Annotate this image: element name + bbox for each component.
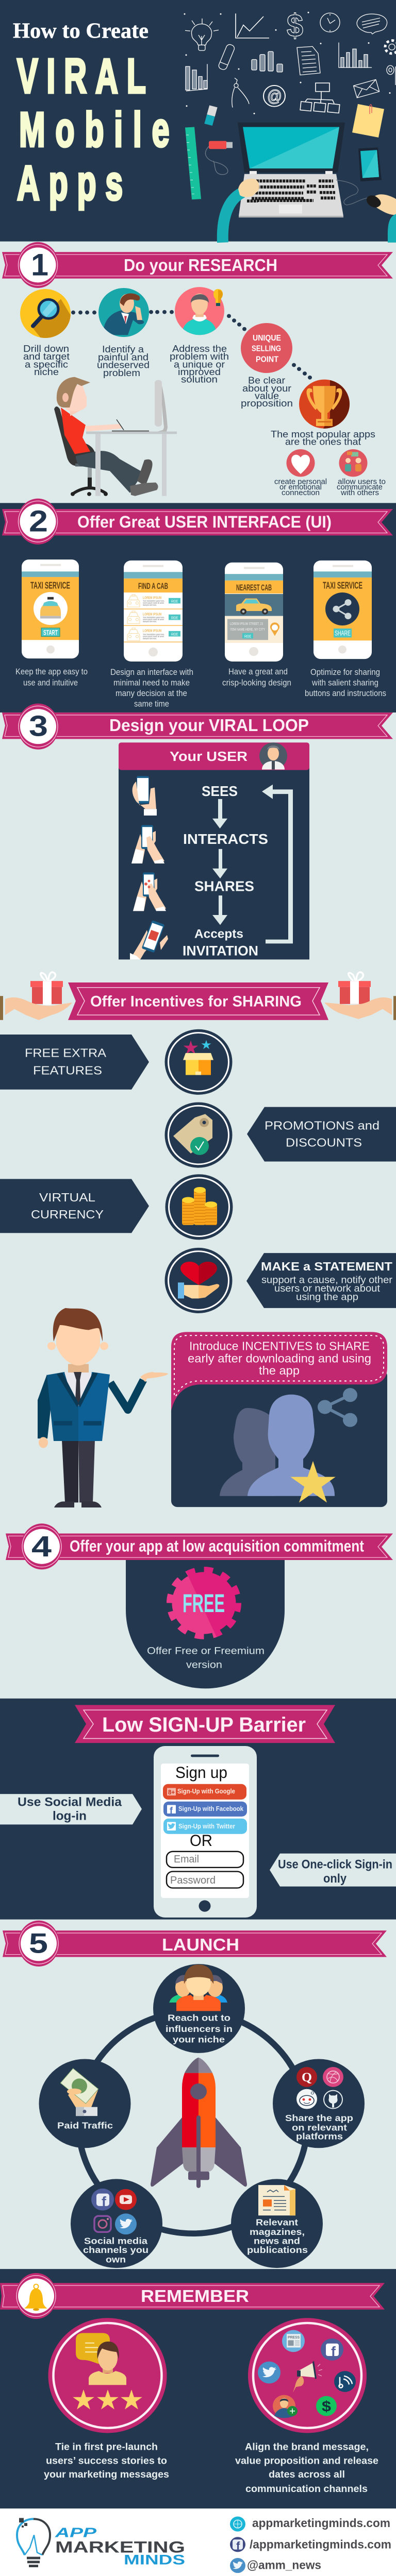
icon: dollar: $ xyxy=(322,2398,332,2415)
icon: add user xyxy=(273,2395,298,2418)
icon: magnifying glass xyxy=(20,289,71,338)
tag: make a statement: support a cause, notify other xyxy=(261,1275,392,1285)
title: Mobile xyxy=(19,102,169,157)
phone: find a cab: Your description goes here, xyxy=(143,600,164,602)
panel: channels circle xyxy=(248,2318,367,2433)
phone: nearest cab: RIDE xyxy=(244,634,251,638)
icon: reddit xyxy=(296,2089,317,2109)
text: tie in success stories: your marketing messages xyxy=(44,2469,169,2480)
icon: logo bulb xyxy=(17,2518,50,2566)
field: password xyxy=(167,1872,243,1888)
text: step captions: undeserved xyxy=(97,360,150,370)
icon: quora: Q xyxy=(302,2070,312,2084)
button: google: 8+ xyxy=(168,1788,175,1796)
icon: github xyxy=(324,2091,342,2109)
icon: hand offering gift right xyxy=(324,972,396,1020)
button: google xyxy=(163,1784,246,1800)
icon: bell xyxy=(24,2284,47,2311)
ribbon: step 5 launch xyxy=(3,1921,387,1967)
icon: unique selling point: UNIQUE xyxy=(253,334,281,343)
icon: facebook xyxy=(91,2189,114,2211)
icon: free badge: FREE xyxy=(183,1589,225,1618)
node: share on platforms: platforms xyxy=(296,2131,343,2142)
text: shares: SHARES xyxy=(194,878,254,894)
text: step captions: Be clear xyxy=(248,375,285,385)
icon: coin stacks xyxy=(165,1174,233,1240)
text: step captions: improved xyxy=(178,366,221,377)
icon: free badge xyxy=(170,1570,238,1636)
node: magazines xyxy=(231,2179,323,2268)
panel: incentives to share speech box xyxy=(171,1332,387,1507)
icon: line chart xyxy=(236,13,269,38)
ribbon: low sign-up barrier xyxy=(75,1705,335,1743)
logo: app marketing minds: MINDS xyxy=(124,2552,185,2568)
arrow: interacts to shares xyxy=(212,849,227,878)
ribbon: step 4 low commitment xyxy=(6,1523,393,1569)
icon: bars xyxy=(252,52,283,72)
text: app qualities: create personal xyxy=(274,478,327,486)
icon: invitation on phone xyxy=(130,920,168,959)
text: step captions: solution xyxy=(181,374,218,384)
icon: laptop xyxy=(238,123,345,217)
icon: dollar: $ xyxy=(287,8,303,44)
phone: find a cab: LOREM IPSUM xyxy=(143,596,161,600)
launch ring xyxy=(78,2011,307,2233)
text: step captions: niche xyxy=(34,366,59,377)
icon: heart in hand xyxy=(165,1248,232,1313)
icon: press: PRESS xyxy=(288,2335,300,2340)
text: step captions: Drill down xyxy=(23,343,69,354)
title: How to Create xyxy=(13,19,148,43)
ribbon: step 3 viral loop: 3 xyxy=(29,710,48,742)
phone: find a cab: lorem ipsum dolor sit amet. xyxy=(143,602,164,604)
tag: free extra features xyxy=(0,1035,149,1090)
ribbon: step 5 launch: LAUNCH xyxy=(162,1936,239,1955)
tag: social media log-in: Use Social Media xyxy=(18,1795,122,1809)
text: introduce incentives: the app xyxy=(259,1364,300,1378)
ribbon: step 1 research xyxy=(2,242,393,288)
icon: trophy xyxy=(299,379,350,429)
text: align the brand message: dates across all xyxy=(269,2469,345,2480)
field: email xyxy=(167,1852,243,1868)
phone: find a cab: RIDE xyxy=(171,616,178,620)
tag: social media log-in: log-in xyxy=(53,1809,87,1823)
icon: hand holding phone xyxy=(133,776,157,816)
icon: envelope xyxy=(354,79,380,98)
text: step captions: value xyxy=(255,391,279,401)
icon: back silhouette xyxy=(220,1408,275,1496)
icon: twitter xyxy=(258,2362,280,2383)
hero doodle icons xyxy=(185,8,396,113)
text: step captions xyxy=(23,343,375,447)
node: share on platforms: on relevant xyxy=(292,2123,347,2132)
node: magazines: magazines, xyxy=(250,2227,305,2237)
button: facebook: f xyxy=(170,1805,173,1816)
phone: find a cab: Sample text here. xyxy=(143,637,157,639)
icon: rocket xyxy=(151,2058,247,2188)
text: align the brand message xyxy=(235,2442,378,2495)
icon: usb stick xyxy=(205,141,233,175)
contact: facebook: f xyxy=(236,2539,240,2552)
icon: at sign: @ xyxy=(267,87,282,105)
contact: twitter xyxy=(230,2558,321,2573)
icon: heart circle xyxy=(287,449,315,477)
tag: promotions and discounts: DISCOUNTS xyxy=(286,1137,362,1149)
panel: free version shield xyxy=(126,1557,285,1688)
phone: nearest cab: 7054 NAME HERE, NY CITY xyxy=(230,627,265,632)
node: share on platforms xyxy=(273,2059,365,2148)
node: social media channels: Social media xyxy=(84,2236,147,2246)
node: social media channels: own xyxy=(106,2255,126,2264)
icon: sharing on phone xyxy=(133,873,166,911)
icon: testimonial person xyxy=(89,2342,126,2385)
node: social media channels xyxy=(71,2179,162,2268)
field: email: Email xyxy=(174,1853,199,1865)
icon: front silhouette xyxy=(248,1395,335,1496)
icon: column chart xyxy=(339,42,372,67)
panel: viral loop xyxy=(119,742,309,959)
icon: price tag with check xyxy=(165,1102,232,1168)
tag: virtual currency: CURRENCY xyxy=(31,1208,104,1222)
panel: testimonial circle xyxy=(48,2318,167,2433)
tag: make a statement: MAKE a STATEMENT xyxy=(261,1260,393,1274)
icon: hand offering gift left xyxy=(0,972,72,1020)
text: step captions: Identify a xyxy=(102,344,144,354)
text: accepts invitation: Accepts xyxy=(194,927,243,941)
icon: ruler xyxy=(185,127,201,199)
text: interface captions: many decision at the xyxy=(116,688,187,698)
ribbon: step 2 user interface xyxy=(2,499,393,545)
text: free or freemium xyxy=(147,1646,265,1671)
text: tie in success stories: Tie in first pre-launch xyxy=(55,2442,158,2452)
icon: typing arms xyxy=(223,179,396,243)
text: step captions: about your xyxy=(242,383,291,394)
icon: finger touching phone xyxy=(131,825,164,863)
icon: facebook: f xyxy=(102,2194,106,2209)
icon: facebook: f xyxy=(331,2344,336,2359)
band: remember background xyxy=(0,2269,396,2509)
node: paid traffic xyxy=(39,2059,131,2148)
text: tie in success stories xyxy=(44,2442,169,2480)
tag: free extra features: FREE EXTRA xyxy=(25,1047,106,1060)
band: research background xyxy=(0,242,396,503)
tag: one-click sign-in xyxy=(270,1854,396,1887)
text: app qualities: communicate xyxy=(337,483,383,492)
field: password: Password xyxy=(170,1874,216,1886)
band: viral loop and incentives background xyxy=(0,713,396,1699)
phone: sign up screen: Sign up xyxy=(175,1764,227,1782)
ribbon: remember xyxy=(0,2273,385,2319)
icon: dollar xyxy=(316,2396,337,2416)
panel header: your user: Your USER xyxy=(170,749,248,764)
tag: social media log-in xyxy=(0,1794,142,1824)
icon: person with idea xyxy=(175,287,224,336)
icon: at sign xyxy=(263,86,285,107)
phone: find a cab: RIDE xyxy=(171,599,178,603)
phone: find a cab: lorem ipsum dolor sit amet. xyxy=(143,618,164,620)
phone: find a cab: FIND A CAB xyxy=(138,581,168,591)
ribbon: remember: REMEMBER xyxy=(141,2287,249,2306)
icon: youtube xyxy=(115,2189,137,2210)
ribbon: offer incentives for sharing xyxy=(68,982,328,1020)
illustration: businessman presenting xyxy=(38,1308,168,1507)
icon: twitter xyxy=(115,2213,137,2234)
phone: find a cab: Sample text here. xyxy=(143,604,157,606)
text: app qualities: connection xyxy=(282,489,320,497)
icon: smartphone xyxy=(358,147,382,181)
phone: sign up screen: OR xyxy=(190,1832,212,1850)
node: magazines: Relevant xyxy=(256,2217,298,2228)
text: interface captions: with salient sharing xyxy=(311,678,378,687)
tag: one-click sign-in: only xyxy=(323,1872,346,1886)
band: launch background xyxy=(0,1920,396,2269)
node: influencers: influencers in xyxy=(166,2024,233,2034)
text: interface captions: use and intuitive xyxy=(23,678,78,687)
title: VIRAL xyxy=(17,48,146,103)
icon: people group xyxy=(169,1964,227,2011)
text: step captions: proposition xyxy=(241,398,293,409)
text: interface captions: Optimize for sharing xyxy=(310,667,380,677)
icon: gear xyxy=(385,41,396,54)
node: magazines: news and xyxy=(254,2236,300,2246)
logo: app marketing minds: MARKETING xyxy=(55,2538,185,2556)
ribbon: step 4 low commitment: 4 xyxy=(31,1531,52,1563)
tag: make a statement: using the app xyxy=(296,1292,358,1302)
ribbon: step 3 viral loop: Design your VIRAL LOOP xyxy=(109,716,309,735)
text: accepts invitation xyxy=(183,927,258,959)
icon: speech bubble xyxy=(76,2333,110,2364)
phone: find a cab: Your description goes here, xyxy=(143,617,164,619)
text: sees: SEES xyxy=(202,783,238,800)
contact: twitter: @amm_news xyxy=(247,2559,321,2572)
phone: nearest cab xyxy=(225,563,283,662)
text: interface captions: Have a great and xyxy=(228,667,288,676)
icon: marker xyxy=(218,43,236,71)
phone: sign up screen xyxy=(154,1746,257,1918)
node: share on platforms: Share the app xyxy=(285,2113,353,2123)
arrow: sees to interacts xyxy=(212,799,227,828)
text: free or freemium: Offer Free or Freemium xyxy=(147,1646,265,1656)
icon: unique selling point: SELLING xyxy=(252,344,281,353)
ribbon: step 2 user interface: Offer Great USER INTERFACE (UI) xyxy=(77,513,332,531)
icon: facebook xyxy=(321,2338,343,2361)
phone: nearest cab: NEAREST CAB xyxy=(236,583,272,592)
node: influencers: your niche xyxy=(173,2035,225,2044)
icon: unique selling point xyxy=(241,323,292,373)
icon: eraser xyxy=(204,105,218,126)
node: magazines: publications xyxy=(247,2245,308,2255)
ribbon: step 1 research: Do your RESEARCH xyxy=(124,256,277,275)
contact: website: appmarketingminds.com xyxy=(252,2517,390,2530)
node: influencers: Reach out to xyxy=(168,2013,230,2023)
icon: speech bubble xyxy=(357,14,387,34)
illustration: person at desk xyxy=(54,377,177,496)
tag: make a statement: users or network about xyxy=(274,1283,381,1294)
phone: taxi service share: SHARE xyxy=(335,630,351,637)
text: align the brand message: Align the brand message, xyxy=(245,2442,369,2452)
button: twitter: Sign-Up with Twitter xyxy=(178,1822,235,1830)
text: app qualities: with others xyxy=(340,489,379,497)
ribbon: step 1 research: 1 xyxy=(31,248,48,282)
button: google: Sign-Up with Google xyxy=(177,1787,235,1795)
phone: find a cab: LOREM IPSUM xyxy=(143,612,161,617)
text: interface captions: buttons and instructions xyxy=(305,688,386,698)
phone: taxi service start: TAXI SERVICE xyxy=(30,580,70,590)
ribbon: step 3 viral loop xyxy=(2,703,393,750)
text: interface captions: minimal need to make xyxy=(113,678,190,687)
icon: star xyxy=(290,1461,336,1503)
arrow: invitation loops back to sees xyxy=(262,785,293,943)
text: interacts: INTERACTS xyxy=(183,832,268,848)
ribbon: offer incentives for sharing: Offer Incentives for SHARING xyxy=(90,993,302,1010)
text: align the brand message: value proposition and release xyxy=(235,2455,378,2467)
phone: taxi service share xyxy=(314,561,372,659)
phone: taxi service start xyxy=(22,560,79,658)
icon: descending chart xyxy=(186,64,207,91)
icon: quora xyxy=(296,2067,317,2087)
text: step captions: problem with xyxy=(170,351,229,362)
ribbon: step 5 launch: 5 xyxy=(29,1928,48,1959)
arrow: shares to invitation xyxy=(212,895,227,925)
phone: taxi service share: TAXI SERVICE xyxy=(323,580,362,590)
text: interface captions: same time xyxy=(134,699,169,708)
icon: compass xyxy=(232,78,249,108)
phone: find a cab: lorem ipsum dolor sit amet. xyxy=(143,635,164,637)
icon: newspaper xyxy=(258,2185,295,2215)
contact: facebook: /appmarketingminds.com xyxy=(250,2538,391,2552)
icon: unique selling point: POINT xyxy=(256,355,278,364)
icon: share nodes xyxy=(318,1388,357,1427)
phone: find a cab: Your description goes here, xyxy=(143,634,164,636)
logo: app marketing minds xyxy=(17,2518,185,2568)
text: step captions: painful and xyxy=(98,352,148,363)
text: introduce incentives xyxy=(188,1340,371,1378)
text: step captions: a specific xyxy=(25,359,68,369)
text: tie in success stories: users’ success stories to xyxy=(46,2455,167,2467)
title: Apps xyxy=(17,156,123,210)
text: app qualities: allow users to xyxy=(338,478,386,486)
tag: promotions and discounts xyxy=(247,1107,396,1161)
phone: find a cab: RIDE xyxy=(171,632,178,636)
text: app qualities xyxy=(274,478,386,497)
text: interface captions: crisp-looking design xyxy=(222,678,291,687)
phone: find a cab: LOREM IPSUM xyxy=(143,629,161,633)
tag: virtual currency: VIRTUAL xyxy=(39,1191,95,1205)
icon: ring xyxy=(387,65,395,85)
text: step captions: The most popular apps xyxy=(271,429,375,439)
icon: sticky note xyxy=(352,104,384,138)
tag: make a statement xyxy=(246,1253,396,1308)
icon: press xyxy=(282,2330,305,2352)
text: introduce incentives: early after downloading and using xyxy=(188,1352,371,1366)
icon: dribbble xyxy=(323,2067,343,2087)
text: step captions: and target xyxy=(23,351,70,362)
hero sparkle dots xyxy=(184,12,391,114)
text: app qualities: or emotional xyxy=(279,483,322,492)
connector dots xyxy=(71,310,312,380)
icon: lightbulb xyxy=(185,19,219,50)
text: align the brand message: communication channels xyxy=(245,2483,368,2495)
icon: gift box with stars xyxy=(165,1029,232,1095)
text: step captions: are the ones that xyxy=(285,436,361,447)
icon: megaphone xyxy=(293,2361,322,2393)
phone: find a cab xyxy=(124,561,183,662)
icon: frustrated man xyxy=(98,288,149,337)
icon: money in hand xyxy=(60,2069,98,2116)
text: step captions: problem xyxy=(103,367,140,378)
icon: rss xyxy=(334,2371,356,2392)
tag: virtual currency xyxy=(0,1179,149,1233)
icon: clock xyxy=(320,13,340,32)
tag: free extra features: FEATURES xyxy=(33,1064,102,1078)
text: step captions: a unique or xyxy=(174,359,225,369)
text: interface captions xyxy=(15,667,386,708)
node: influencers xyxy=(153,1964,245,2053)
text: interface captions: Keep the app easy to xyxy=(15,667,88,676)
button: facebook: Sign-Up with Facebook xyxy=(178,1805,244,1812)
icon: communicating people xyxy=(339,449,367,477)
band: hero background xyxy=(0,0,396,242)
node: social media channels: channels you xyxy=(83,2245,148,2255)
phone: nearest cab: LOREM IPSUM STREET, 23 xyxy=(230,621,263,626)
phone: find a cab: Sample text here. xyxy=(143,620,157,622)
logo: app marketing minds: APP xyxy=(55,2525,96,2540)
band: footer background xyxy=(0,2509,396,2576)
band: user interface background xyxy=(0,503,396,713)
icon: rating stars xyxy=(73,2389,142,2410)
text: introduce incentives: Introduce INCENTIVES to SHARE xyxy=(189,1340,370,1353)
ribbon: low sign-up barrier: Low SIGN-UP Barrier xyxy=(102,1713,306,1736)
text: step captions: Address the xyxy=(172,343,227,354)
band: sign-up background xyxy=(0,1699,396,1920)
text: interface captions: Design an interface with xyxy=(110,667,193,677)
title xyxy=(13,19,169,210)
phone: taxi service start: START xyxy=(43,629,58,636)
button: facebook xyxy=(163,1802,247,1817)
tag: promotions and discounts: PROMOTIONS and xyxy=(265,1120,380,1132)
node: paid traffic: Paid Traffic xyxy=(57,2121,113,2130)
text: accepts invitation: INVITATION xyxy=(183,943,258,959)
icon: document xyxy=(297,46,320,75)
panel header: your user xyxy=(119,742,309,770)
button: twitter xyxy=(163,1819,247,1834)
icon: instagram xyxy=(94,2216,111,2232)
text: free or freemium: version xyxy=(186,1659,222,1671)
icon: flow chart xyxy=(300,83,340,113)
ribbon: step 2 user interface: 2 xyxy=(29,504,48,538)
